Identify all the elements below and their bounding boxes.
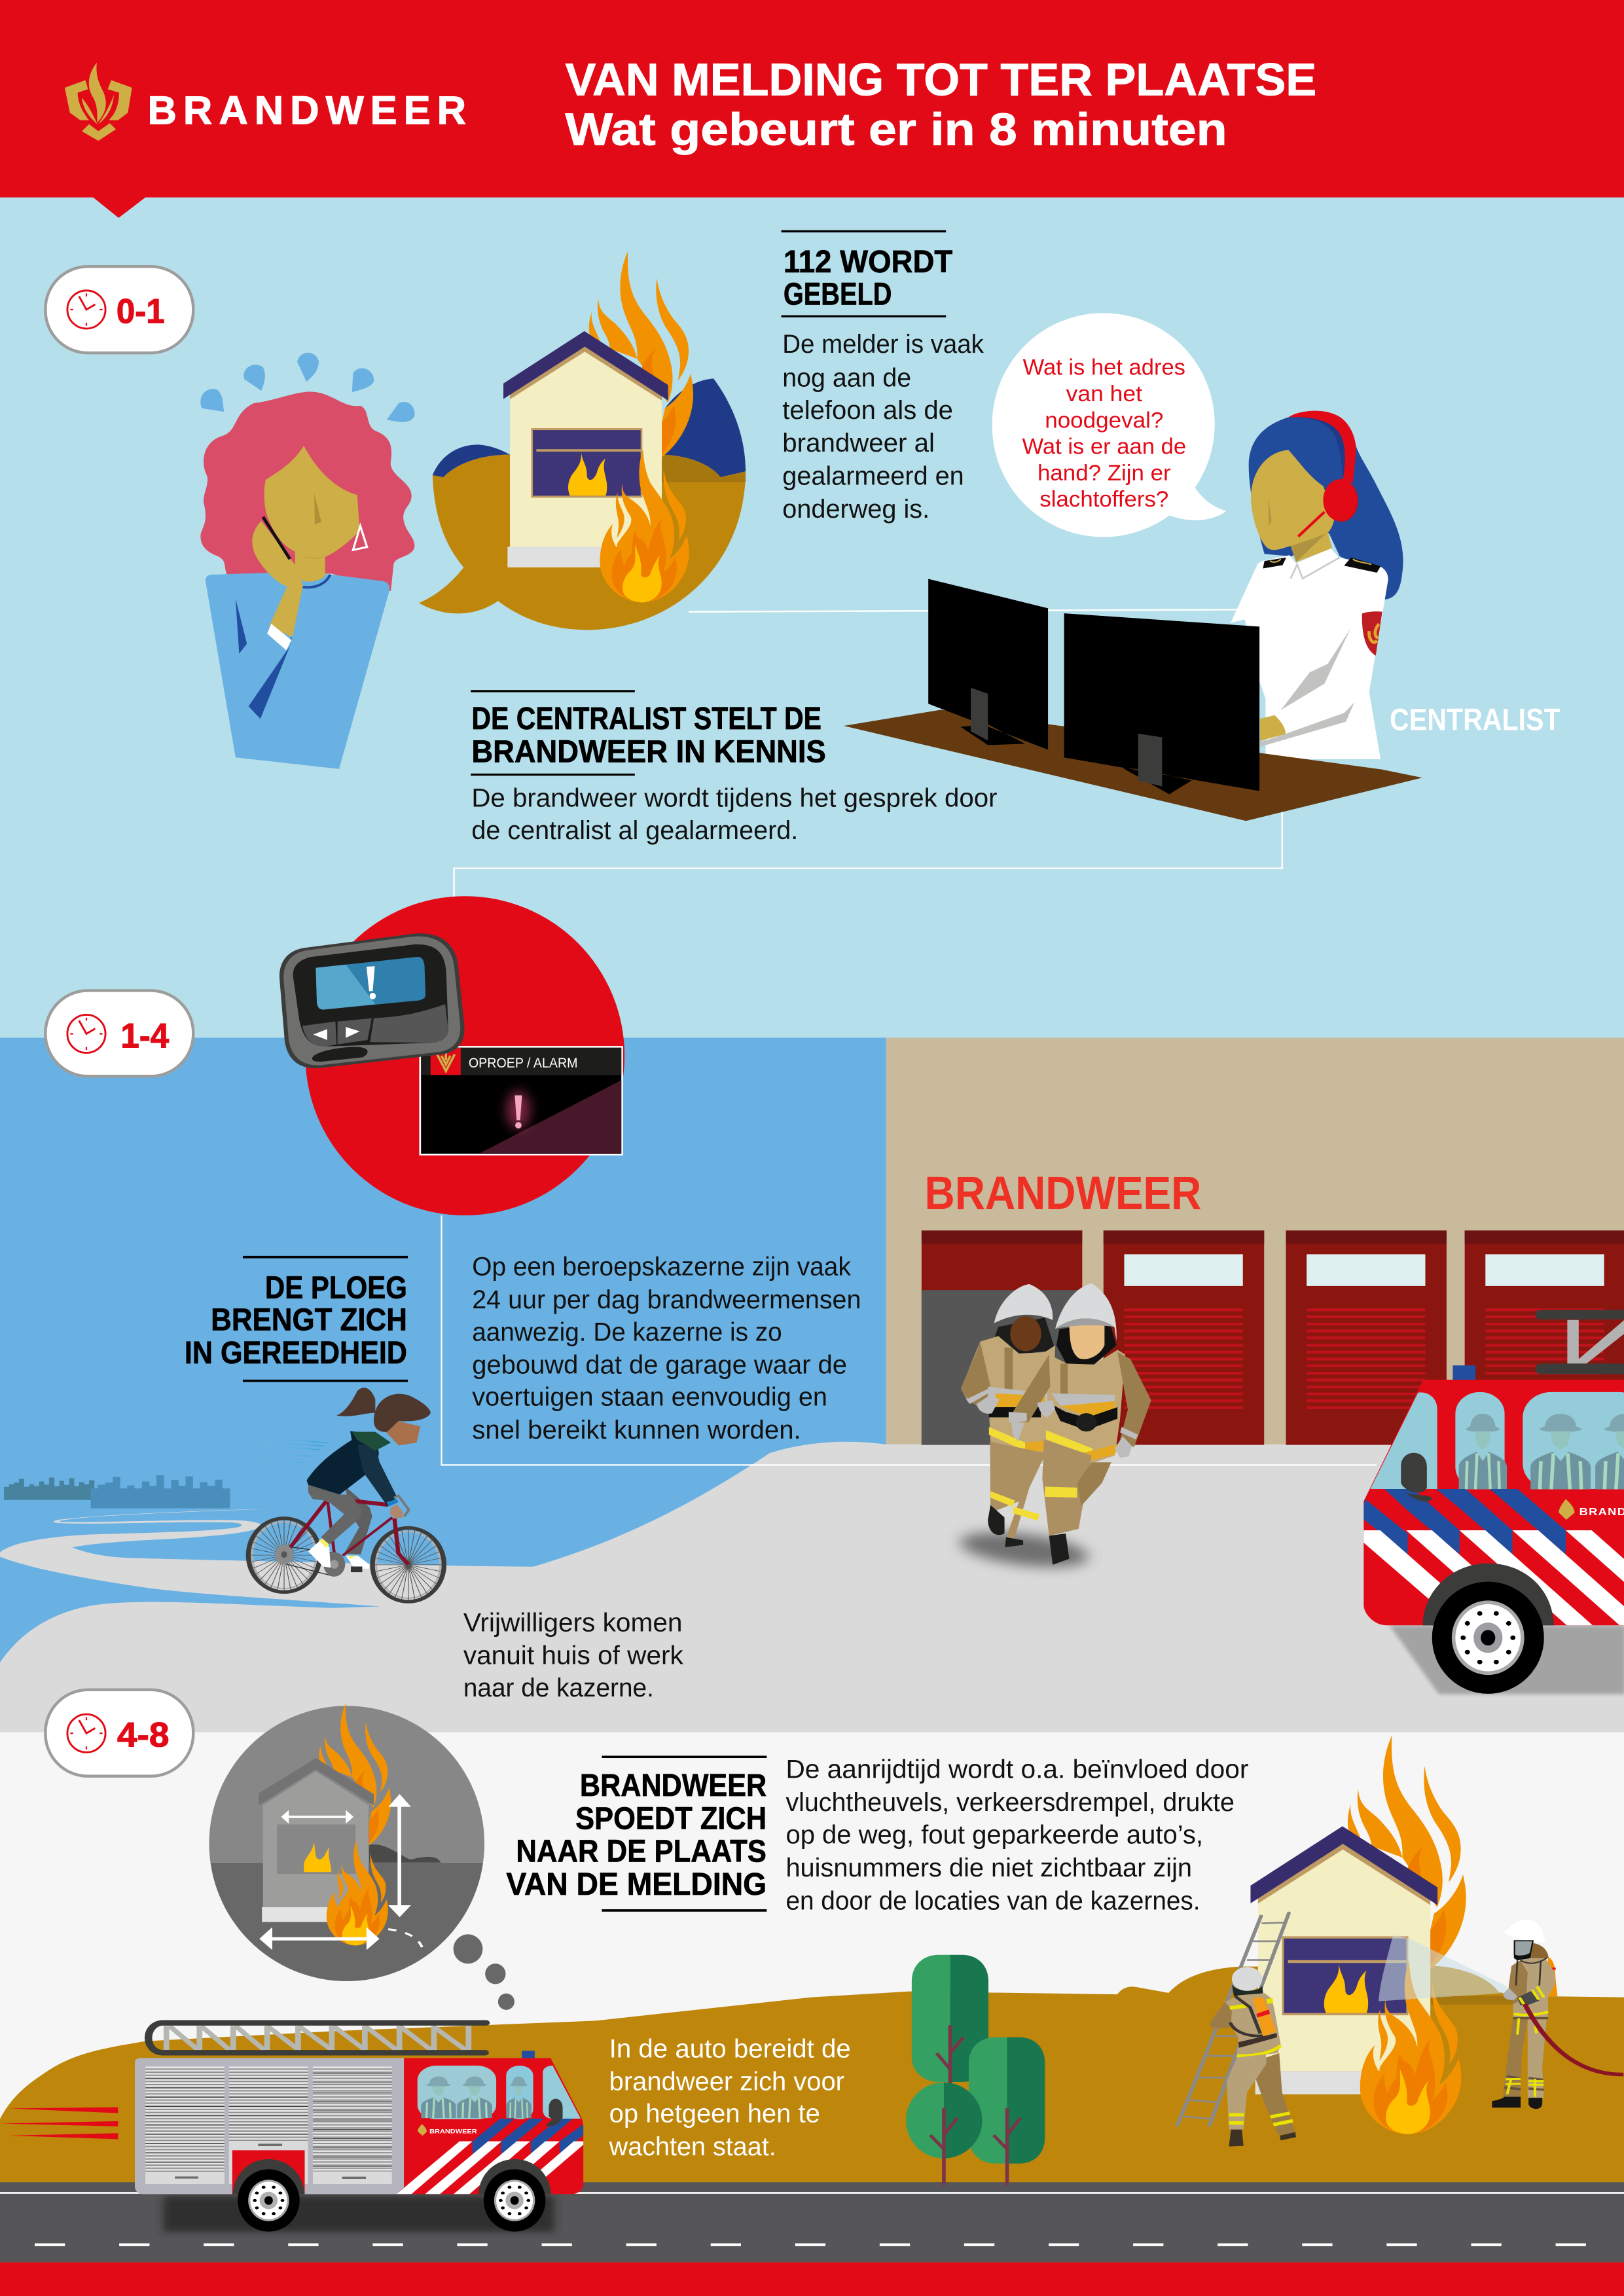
mirror	[547, 2099, 563, 2126]
text: in de auto: op hetgeen hen te	[609, 2099, 820, 2128]
background: golden hill	[0, 1966, 1624, 2189]
subtitle: Wat gebeurt er in 8 minuten	[566, 103, 1227, 154]
text: melder: gealarmeerd en	[782, 461, 964, 491]
text: aanrijdtijd	[785, 1755, 1248, 1915]
ghost crew	[1459, 1414, 1507, 1490]
heading: 112 wordt gebeld: 112 WORDT	[784, 244, 952, 279]
text: aanrijdtijd: De aanrijdtijd wordt o.a. beïnvloed door	[785, 1755, 1248, 1784]
speech bubble: centralist: noodgeval?	[1045, 408, 1163, 433]
heading: brandweer spoedt: BRANDWEER	[580, 1768, 767, 1803]
hand and brake	[394, 1496, 409, 1516]
flames in front of house	[600, 450, 689, 602]
text: beroepskazerne: voertuigen staan eenvoudig en	[472, 1382, 827, 1412]
hand	[1260, 715, 1286, 741]
scarf	[352, 1432, 391, 1451]
speech bubble: centralist: hand? Zijn er	[1038, 461, 1171, 486]
heading: brandweer spoedt: VAN DE MELDING	[506, 1867, 767, 1902]
time badge 0-1: 0-1	[117, 293, 165, 331]
grey body	[135, 2058, 405, 2194]
front shoe	[308, 1540, 331, 1568]
shadow	[958, 1526, 1091, 1573]
heading: de centralist stelt: BRANDWEER IN KENNIS	[471, 734, 826, 769]
time badge 1-4: 1-4	[120, 1017, 169, 1056]
footer band	[0, 2263, 1624, 2296]
background: section 4-8	[0, 1732, 1624, 2186]
frame	[284, 1501, 408, 1564]
label: centralist: CENTRALIST	[1390, 702, 1561, 736]
speed lines	[238, 1440, 328, 1467]
text: aanrijdtijd: vluchtheuvels, verkeersdrempel, drukte	[785, 1787, 1235, 1817]
hill shadow band	[1431, 1996, 1513, 2005]
speech bubble with burning house	[419, 251, 746, 630]
firefighter with hose	[1492, 1920, 1623, 2109]
text: beroepskazerne: 24 uur per dag brandweermensen	[472, 1285, 861, 1314]
ladder	[1178, 1913, 1289, 2125]
text: centralist alarm: de centralist al gealarmeerd.	[471, 816, 798, 845]
background: section 1-4 water	[0, 1038, 1624, 1740]
text: aanrijdtijd: huisnummers die niet zichtbaar zijn	[785, 1853, 1192, 1882]
heading: de ploeg	[185, 1257, 408, 1381]
hand and arm	[252, 521, 303, 637]
white line: kazerne text box	[442, 1215, 1377, 1465]
background: kazerne wall	[886, 1038, 1624, 1455]
bubble and hills	[419, 378, 746, 630]
neck and face	[295, 546, 325, 582]
text: beroepskazerne: aanwezig. De kazerne is zo	[472, 1318, 782, 1347]
text: melder: nog aan de	[782, 363, 911, 393]
grey house	[259, 1758, 374, 1922]
text: in de auto: In de auto bereidt de	[609, 2034, 851, 2063]
text: melder: brandweer al	[782, 428, 935, 457]
kazerne sign: BRANDWEER	[925, 1167, 1201, 1219]
cab logo	[418, 2124, 427, 2136]
wheels	[248, 1518, 444, 1602]
text: vrijwilligers: naar de kazerne.	[463, 1673, 654, 1702]
text: melder	[782, 329, 984, 524]
heading: de ploeg: IN GEREEDHEID	[185, 1335, 407, 1371]
sweat drops	[200, 353, 414, 422]
front leg	[308, 1484, 362, 1545]
firefighters running	[958, 1283, 1151, 1573]
alarm screen: OPROEP / ALARM	[469, 1055, 578, 1071]
thought dots	[454, 1934, 482, 1964]
text: melder: telefoon als de	[782, 395, 953, 425]
grey flames front	[327, 1840, 388, 1945]
background: section 0-1 sky	[0, 196, 1624, 1038]
heading: de centralist stelt: DE CENTRALIST STELT DE	[471, 701, 821, 736]
cab	[1361, 1377, 1624, 1628]
measurement arrows	[259, 1794, 422, 1950]
text: melder: De melder is vaak	[782, 329, 984, 359]
ladder	[1567, 1320, 1624, 1363]
saddle	[312, 1494, 325, 1499]
heading: brandweer spoedt	[506, 1757, 767, 1910]
speech bubble: centralist: Wat is het adres	[1023, 355, 1185, 380]
grey flames behind	[319, 1703, 391, 1845]
headset	[1288, 411, 1356, 482]
head and hair	[386, 1418, 420, 1445]
blue light	[522, 2051, 535, 2058]
time badge 0-1	[45, 266, 193, 353]
thought bubble	[205, 1703, 514, 2010]
alarm circle	[305, 896, 624, 1215]
skyline	[4, 1477, 94, 1500]
front firefighter	[1009, 1283, 1151, 1565]
hair	[1249, 416, 1403, 600]
truck logo text	[1559, 1499, 1574, 1520]
time badge 4-8: 4-8	[117, 1715, 169, 1754]
fire truck side view: BRANDWEER	[429, 2128, 477, 2135]
garage doors	[922, 1230, 1624, 1445]
background: grey ground and winding road	[0, 1442, 1624, 1732]
firefighter on ladder	[1210, 1967, 1296, 2147]
alarm screen	[420, 1047, 623, 1155]
shutters	[145, 2066, 392, 2184]
text: beroepskazerne: Op een beroepskazerne zijn vaak	[472, 1252, 852, 1282]
text: in de auto	[609, 2034, 851, 2161]
fire truck front view at kazerne	[1361, 1310, 1624, 1695]
text: centralist alarm: De brandweer wordt tijdens het gesprek door	[471, 783, 997, 813]
text: aanrijdtijd: op de weg, fout geparkeerde auto’s,	[785, 1820, 1203, 1850]
heading: de ploeg: BRENGT ZICH	[211, 1302, 407, 1338]
heading: 112 wordt gebeld	[782, 231, 952, 316]
ladder rails	[149, 2023, 486, 2053]
centralist operator	[844, 411, 1422, 821]
neck	[1291, 531, 1332, 562]
hair	[200, 391, 414, 591]
water spray	[1379, 1935, 1507, 2001]
caller woman with phone	[200, 353, 414, 769]
speed lines	[0, 2107, 118, 2139]
text: beroepskazerne	[472, 1252, 861, 1444]
collar	[1291, 558, 1340, 579]
header	[0, 0, 1624, 218]
connector lines	[454, 609, 1282, 901]
text: beroepskazerne: snel bereikt kunnen worden.	[472, 1415, 801, 1444]
flames behind house	[589, 251, 693, 457]
back firefighter	[961, 1284, 1055, 1547]
blue light	[1453, 1365, 1475, 1380]
time badge 1-4	[45, 990, 193, 1076]
back leg	[344, 1487, 372, 1554]
cab	[395, 2058, 587, 2195]
speech bubble: centralist: van het	[1066, 382, 1142, 406]
heading: 112 wordt gebeld: GEBELD	[784, 276, 892, 312]
epaulettes	[1263, 558, 1380, 573]
truck shadow	[1390, 1625, 1624, 1695]
jacket	[306, 1431, 397, 1507]
text: in de auto: brandweer zich voor	[609, 2066, 844, 2096]
logo wordmark: BRANDWEER	[148, 88, 466, 134]
text: melder: onderweg is.	[782, 494, 929, 524]
house	[503, 331, 668, 567]
cyclist	[4, 1388, 444, 1602]
text: beroepskazerne: gebouwd dat de garage waar de	[472, 1350, 847, 1380]
body	[206, 572, 389, 769]
mirror	[1401, 1453, 1432, 1501]
shirt	[1231, 548, 1388, 759]
wheel	[1422, 1564, 1554, 1625]
pager	[280, 933, 465, 1068]
monitors	[928, 579, 1259, 794]
title: VAN MELDING TOT TER PLAATSE	[566, 54, 1316, 105]
speech bubble: centralist	[992, 313, 1226, 537]
ladder truss	[166, 2026, 469, 2050]
face	[1251, 450, 1334, 550]
heading: de centralist stelt	[471, 691, 826, 775]
shadow	[164, 2196, 554, 2232]
logo: Brandweer shield	[65, 63, 132, 141]
kazerne	[922, 1167, 1624, 1445]
time badge 4-8	[45, 1690, 193, 1776]
speech bubble: centralist: slachtoffers?	[1039, 487, 1168, 512]
heading: brandweer spoedt: SPOEDT ZICH	[575, 1801, 767, 1836]
text: in de auto: wachten staat.	[609, 2132, 776, 2161]
sleeve badge	[1362, 611, 1382, 656]
drivetrain	[285, 1547, 334, 1576]
text: vrijwilligers	[463, 1607, 684, 1702]
wheels	[232, 2159, 551, 2194]
text: vrijwilligers: Vrijwilligers komen	[463, 1607, 683, 1637]
desk	[844, 709, 1422, 821]
heading: de ploeg: DE PLOEG	[265, 1270, 407, 1305]
fire truck side view	[135, 2023, 587, 2232]
text: vrijwilligers: vanuit huis of werk	[463, 1640, 684, 1670]
text: aanrijdtijd: en door de locaties van de kazernes.	[785, 1886, 1200, 1915]
heading: brandweer spoedt: NAAR DE PLAATS	[516, 1834, 767, 1869]
text: centralist alarm	[471, 783, 997, 845]
firefighters extinguishing	[1178, 1913, 1623, 2147]
road	[0, 2182, 1624, 2263]
speech bubble: centralist: Wat is er aan de	[1022, 435, 1186, 459]
trees	[906, 1955, 1045, 2185]
burning house at destination	[1250, 1735, 1466, 2134]
